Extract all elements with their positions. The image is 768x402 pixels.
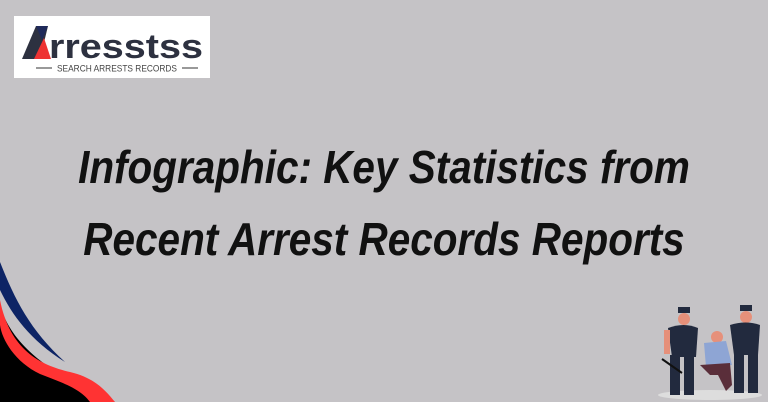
logo A mark [22, 26, 51, 59]
logo tagline: SEARCH ARRESTS RECORDS [57, 64, 177, 74]
decorative swoosh bottom-left [0, 262, 115, 402]
logo wordmark: rresstss [49, 28, 203, 66]
suspect [700, 331, 732, 391]
left officer [662, 307, 698, 395]
title: Infographic: Key Statistics from [78, 141, 690, 193]
logo [14, 16, 210, 78]
right officer [730, 305, 760, 393]
title [78, 141, 690, 265]
title: Recent Arrest Records Reports [83, 213, 685, 265]
illustration: police arresting person [658, 305, 762, 400]
